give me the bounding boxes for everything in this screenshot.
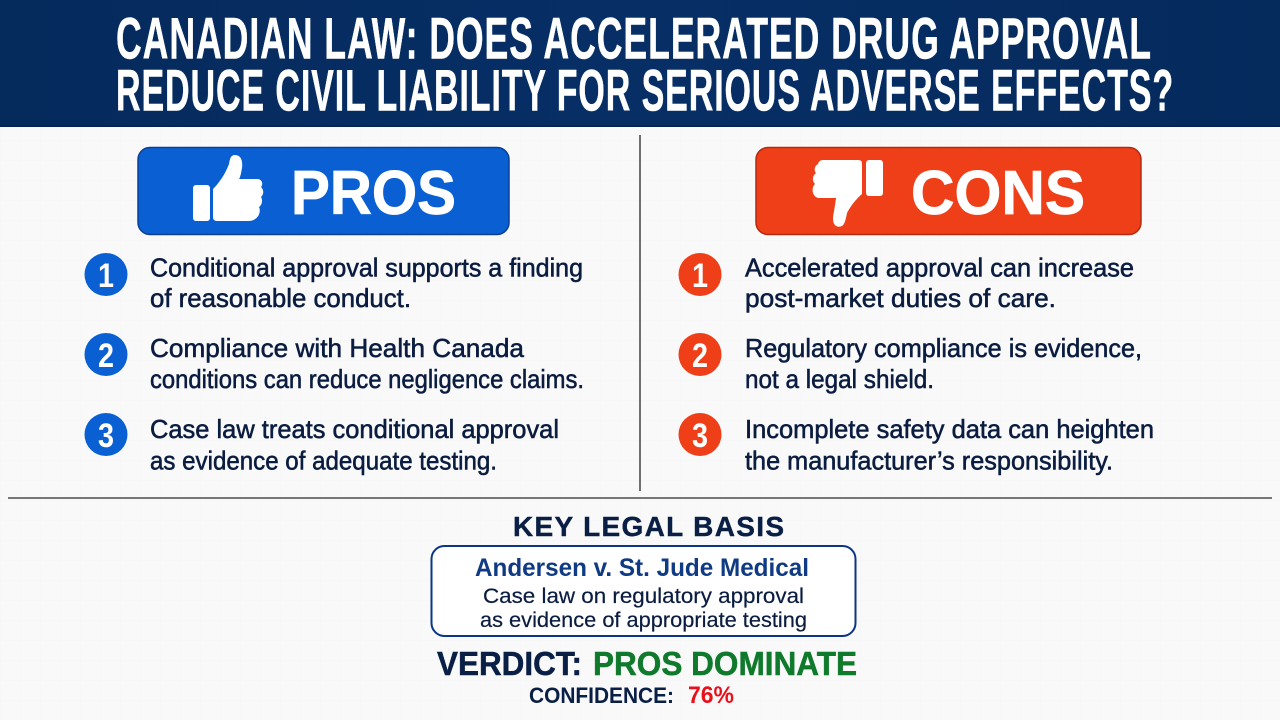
confidence value: 76% — [688, 682, 734, 709]
con item 2: not a legal shield. — [745, 364, 934, 394]
pro item 3 — [84, 413, 559, 476]
callout: case law box: Andersen v. St. Jude Medical — [475, 554, 809, 582]
verdict: VERDICT: — [437, 645, 582, 682]
panel: cons — [678, 148, 1154, 476]
con item 2 — [678, 333, 1142, 394]
con item 3: the manufacturer’s responsibility. — [745, 446, 1113, 476]
con item 2: Regulatory compliance is evidence, — [745, 333, 1142, 363]
cons header button — [756, 148, 1141, 234]
pro item 1: 1 — [98, 257, 114, 295]
icon: thumbs down — [813, 160, 883, 227]
pros header button: PROS — [291, 159, 456, 228]
icon: thumbs up — [193, 155, 263, 221]
con item 3 — [678, 413, 1154, 476]
con item 1: Accelerated approval can increase — [745, 252, 1134, 282]
con item 1: 1 — [692, 257, 708, 295]
con item 3: Incomplete safety data can heighten — [745, 414, 1154, 444]
callout: case law box — [432, 546, 856, 636]
con item 2: 2 — [692, 337, 708, 375]
pro item 1: of reasonable conduct. — [150, 283, 411, 313]
pro item 1 — [84, 252, 583, 313]
heading: key legal basis: KEY LEGAL BASIS — [513, 511, 784, 542]
con item 1: post-market duties of care. — [745, 283, 1056, 313]
pro item 2: conditions can reduce negligence claims. — [150, 364, 584, 394]
title banner — [0, 0, 1280, 127]
pros header button — [138, 148, 509, 234]
pro item 2: Compliance with Health Canada — [150, 333, 525, 363]
panel: pros — [84, 148, 584, 476]
verdict result: PROS DOMINATE — [593, 645, 857, 682]
pro item 3: Case law treats conditional approval — [150, 414, 559, 444]
con item 3: 3 — [692, 417, 708, 455]
pro item 1: Conditional approval supports a finding — [150, 252, 583, 282]
pro item 3: 3 — [98, 417, 114, 455]
cons header button: CONS — [911, 159, 1085, 228]
callout: case law box: Case law on regulatory approval — [483, 585, 804, 608]
con item 1 — [678, 252, 1134, 313]
callout: case law box: as evidence of appropriate testing — [480, 609, 807, 632]
pro item 2 — [84, 333, 584, 394]
pro item 2: 2 — [98, 337, 114, 375]
pro item 3: as evidence of adequate testing. — [150, 446, 497, 476]
confidence label: CONFIDENCE: — [529, 683, 674, 708]
